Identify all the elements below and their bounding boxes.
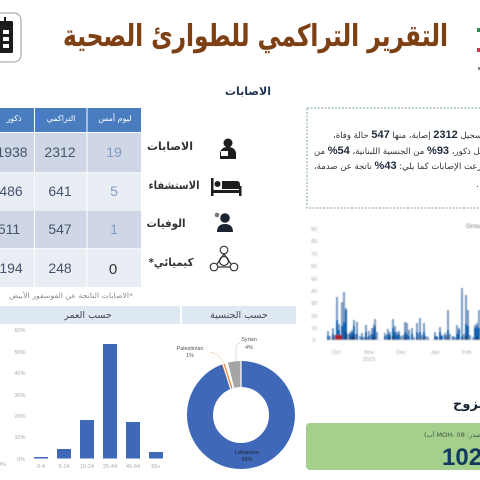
table row: injuries: 2312 [44, 144, 76, 160]
age axis labels: 45-64 [126, 464, 140, 470]
age axis labels: 30% [14, 393, 26, 399]
table row: chemical [0, 248, 141, 287]
table header: ليوم أمس [98, 113, 132, 123]
age axis labels: 0-4 [37, 464, 45, 470]
icon: chemical hazard [210, 246, 238, 271]
icon: bed [211, 178, 242, 196]
age axis labels: 10% [14, 435, 26, 441]
y axis labels: 90 [311, 227, 317, 233]
logo fragment [477, 28, 480, 70]
panel: age chart [0, 306, 180, 470]
icon: deceased person [215, 213, 233, 232]
dark bars [333, 332, 477, 340]
age axis labels: 5-14 [58, 464, 70, 470]
table row: recovered: 486 [0, 183, 23, 199]
month labels: Dec [396, 350, 406, 356]
table row: injuries [0, 133, 141, 172]
table row: injuries: 19 [106, 144, 122, 160]
y axis labels [311, 227, 317, 344]
age bars [34, 344, 163, 458]
table row: deaths: 547 [48, 221, 72, 237]
month labels: Oct [332, 350, 341, 356]
panel: displacement count [306, 423, 480, 471]
y axis labels: 50 [311, 277, 317, 283]
month labels: Feb [462, 350, 472, 356]
age axis labels: 40% [14, 371, 26, 377]
donut [188, 361, 294, 468]
y axis labels: 30 [311, 301, 317, 307]
y axis labels: 10 [311, 326, 317, 332]
nationality heading [182, 306, 296, 324]
table row: chemical: 0 [109, 261, 117, 278]
donut label: Lebanese: Lebanese [235, 450, 259, 456]
age axis labels: 0% [17, 457, 25, 463]
donut label: Syrian: 4% [245, 345, 253, 351]
table header: التراكمي [47, 114, 75, 123]
y axis labels: 80 [311, 239, 317, 245]
donut label: Syrian: Syrian [241, 337, 257, 343]
table row: chemical: 248 [48, 260, 72, 276]
table row: deaths: 1 [110, 221, 118, 237]
donut label: Palestinian: 1% [186, 353, 194, 359]
icon: injured person [220, 138, 236, 159]
donut label: Palestinian: Palestinian [177, 346, 203, 352]
y axis labels: 20 [311, 314, 317, 320]
summary line 4: . [476, 180, 479, 190]
panel: nationality chart [177, 306, 296, 468]
month labels: Nov [364, 350, 374, 356]
table header: ذكور [5, 114, 22, 123]
age axis labels: 15-24 [80, 464, 94, 470]
y axis labels: 60 [311, 264, 317, 270]
month labels [332, 350, 472, 363]
chart: daily cases timeline [311, 223, 480, 363]
age axis labels: 65+ [151, 464, 161, 470]
donut label: Lebanese [235, 450, 259, 463]
panel: summary text [307, 108, 480, 208]
month labels: 2023 [363, 357, 375, 363]
month labels: Jan [431, 350, 439, 356]
age axis labels [0, 328, 161, 470]
label: deaths: الوفيات [146, 217, 186, 230]
age heading [0, 306, 180, 324]
age axis labels: 50% [14, 350, 26, 356]
medium bars [328, 310, 479, 340]
table row: recovered [0, 172, 141, 210]
table row: recovered: 641 [48, 183, 72, 199]
table row: recovered: 5 [110, 183, 118, 199]
label: injuries: الاصابات [147, 140, 193, 153]
age axis labels: 25-44 [103, 464, 117, 470]
red bars [335, 335, 342, 340]
light bars [328, 288, 479, 340]
table: injury counts [0, 108, 141, 287]
donut label: Syrian [236, 337, 257, 361]
y axis labels: 40 [311, 289, 317, 295]
x axis line [324, 339, 480, 341]
label: recovery: الاستشفاء [148, 179, 200, 192]
donut label: Palestinian [177, 346, 224, 363]
age axis labels: 20% [14, 414, 26, 420]
table row: deaths [0, 210, 141, 248]
table header [0, 108, 141, 132]
y axis labels: 70 [311, 252, 317, 258]
table row: chemical: 194 [0, 260, 23, 276]
nationality heading: حسب الجنسية [210, 310, 268, 321]
age heading: حسب العمر [63, 310, 112, 321]
icon: calendar [0, 13, 21, 62]
heading: injuries: الاصابات [225, 85, 271, 98]
age axis labels: 60% [14, 328, 26, 334]
donut label: Lebanese: 93% [241, 457, 253, 463]
label: chemical: كيميائي* [148, 256, 194, 269]
footnote: *الاصابات الناتجة عن الفوسفور الأبيض [9, 291, 134, 300]
y axis labels: 0 [312, 338, 316, 344]
